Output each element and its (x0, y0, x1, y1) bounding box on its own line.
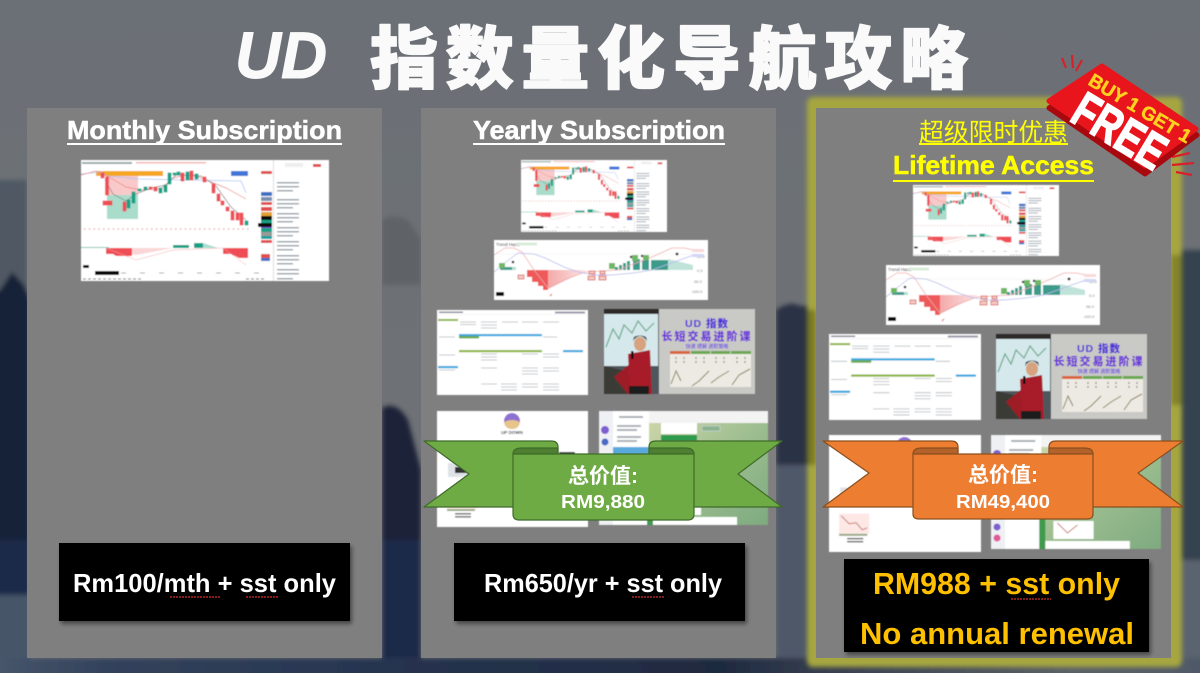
price box: monthly: Rm100/mth + sst only (73, 568, 337, 598)
title: UD (235, 18, 327, 92)
heading: lifetime access: Lifetime Access (893, 150, 1094, 180)
ribbon: total value orange: 总价值: (968, 464, 1038, 487)
messenger screenshot (991, 435, 1161, 549)
price box: yearly: Rm650/yr + sst only (484, 568, 723, 598)
panel: yearly subscription (421, 108, 782, 658)
price box: monthly (59, 543, 350, 621)
messenger screenshot (599, 411, 768, 525)
badge: buy 1 get 1 free (1049, 55, 1197, 181)
ribbon: total value orange: RM49,400 (956, 491, 1050, 512)
heading: limited offer: 超级限时优惠 (919, 119, 1068, 147)
chart: trend oscillator (494, 240, 708, 300)
chart: candlestick screenshot (521, 160, 667, 232)
chart: candlestick screenshot (81, 160, 329, 281)
ribbon: total value orange (823, 441, 1183, 519)
ribbon: total value green: RM9,880 (561, 491, 645, 512)
price box: yearly (454, 543, 745, 621)
price box: lifetime: No annual renewal (860, 616, 1134, 651)
chart: trend oscillator (886, 265, 1100, 325)
document screenshot (437, 411, 588, 527)
panel: lifetime access with yellow glow (807, 97, 1183, 667)
title: 指数量化导航攻略 (370, 22, 968, 98)
document screenshot (829, 435, 981, 552)
lecture photo (604, 309, 755, 394)
chart: candlestick screenshot (913, 185, 1059, 256)
ribbon: total value green (424, 441, 782, 520)
calendar screenshot (829, 334, 981, 420)
badge: buy 1 get 1 free: BUY 1 GET 1 (1084, 70, 1195, 148)
heading: yearly: Yearly Subscription (473, 115, 725, 145)
price box: lifetime (844, 559, 1149, 652)
ribbon: total value green: 总价值: (568, 465, 638, 488)
lecture photo (996, 334, 1147, 419)
price box: lifetime: RM988 + sst only (873, 566, 1121, 601)
panel: monthly subscription (27, 108, 382, 658)
calendar screenshot (437, 310, 588, 395)
heading: monthly: Monthly Subscription (67, 115, 342, 145)
